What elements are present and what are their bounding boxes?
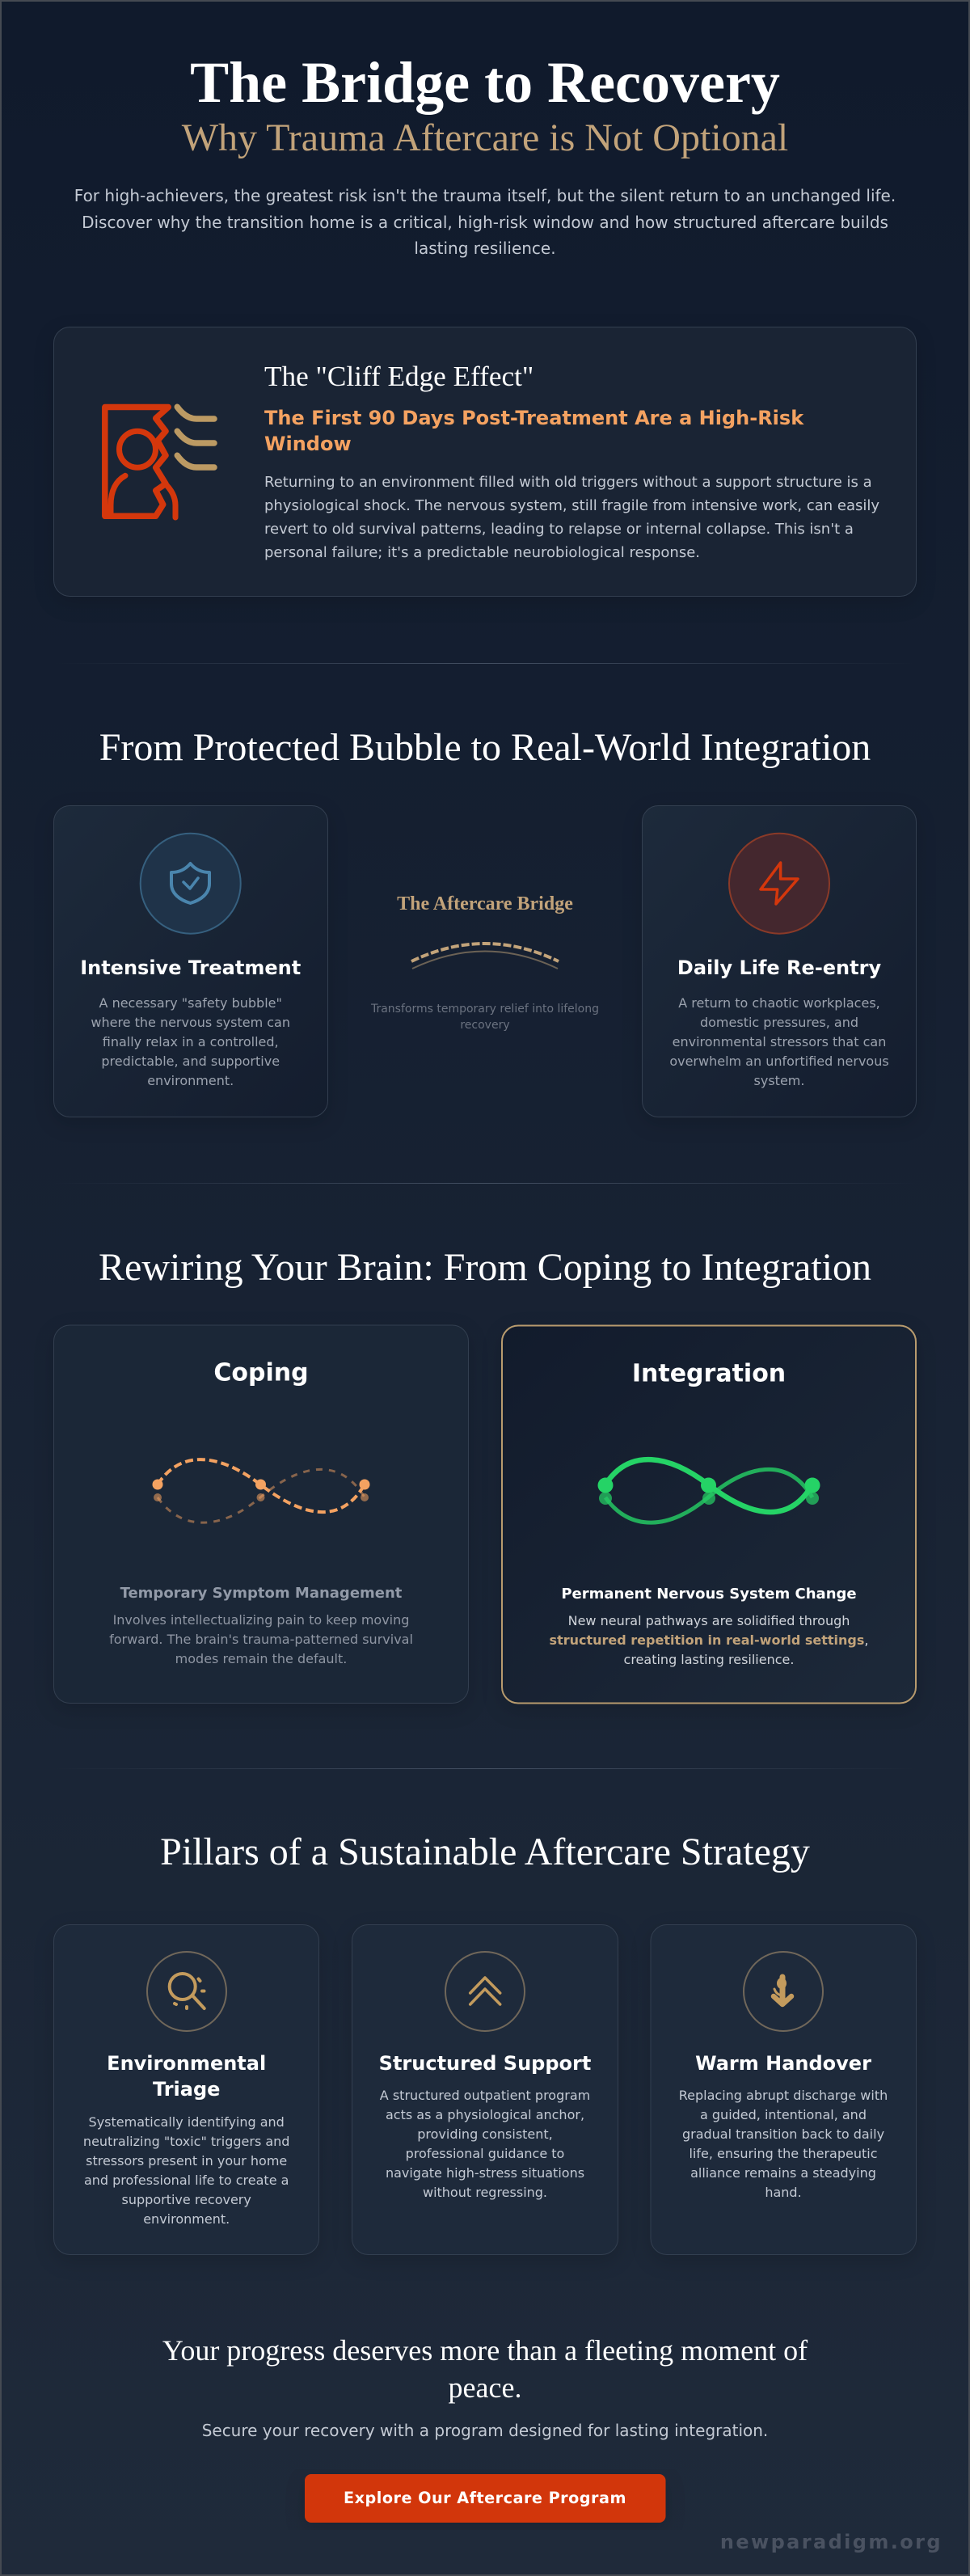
panel: environmental triage xyxy=(53,1924,318,2254)
call to action heading: peace. xyxy=(449,2371,521,2404)
card text: revert to old survival patterns, leading to relapse or internal collapse. This isn't a xyxy=(264,521,854,538)
heading: Environmental xyxy=(107,2052,266,2075)
button: Explore Our Aftercare Program xyxy=(344,2489,626,2507)
section heading: rewiring: Rewiring Your Brain: From Coping to Integration xyxy=(99,1246,871,1289)
chart: dashed neural pathways xyxy=(152,1459,370,1522)
card subheading: The First 90 Days Post-Treatment Are a High-Risk xyxy=(264,407,804,429)
title: The Bridge to Recovery xyxy=(190,50,780,115)
section heading: pillars: Pillars of a Sustainable Aftercare Strategy xyxy=(160,1831,810,1873)
text: A return to chaotic workplaces, xyxy=(678,995,880,1011)
text: overwhelm an unfortified nervous xyxy=(669,1054,889,1069)
intro text: lasting resilience. xyxy=(414,239,556,258)
text: professional guidance to xyxy=(406,2146,564,2161)
icon: anchor xyxy=(744,1952,823,2031)
card heading: The "Cliff Edge Effect" xyxy=(264,361,534,392)
heading: The Aftercare Bridge xyxy=(397,893,573,914)
text: Replacing abrupt discharge with xyxy=(679,2088,888,2103)
text xyxy=(550,1613,868,1667)
panel: structured support xyxy=(352,1924,618,2254)
heading: Coping xyxy=(213,1358,309,1387)
text: stressors present in your home xyxy=(86,2153,287,2168)
card text xyxy=(264,474,879,561)
icon: shield xyxy=(141,834,241,934)
text: finally relax in a controlled, xyxy=(103,1034,279,1049)
text: neutralizing "toxic" triggers and xyxy=(83,2134,289,2149)
text: predictable, and supportive xyxy=(101,1054,280,1069)
card subheading xyxy=(264,407,804,455)
text: providing consistent, xyxy=(417,2126,553,2142)
intro text: Discover why the transition home is a critical, high-risk window and how structured aftercare builds xyxy=(82,213,888,232)
text: environment. xyxy=(147,1073,234,1088)
heading: Structured Support xyxy=(379,2052,591,2075)
text: where the nervous system can xyxy=(91,1015,290,1030)
panel: integration xyxy=(502,1326,916,1703)
text: supportive recovery xyxy=(122,2192,251,2207)
text: Involves intellectualizing pain to keep moving xyxy=(113,1612,409,1628)
panel: intensive treatment xyxy=(53,805,328,1117)
text: forward. The brain's trauma-patterned survival xyxy=(109,1632,413,1647)
text: New neural pathways are solidified through xyxy=(568,1613,850,1628)
heading: Daily Life Re-entry xyxy=(677,956,881,979)
text xyxy=(91,995,290,1088)
text: A necessary "safety bubble" xyxy=(99,995,282,1011)
text: alliance remains a steadying xyxy=(690,2165,876,2181)
intro text xyxy=(74,186,896,258)
heading xyxy=(107,2052,266,2101)
icon: chevrons xyxy=(445,1952,525,2031)
text: gradual transition back to daily xyxy=(682,2126,884,2142)
subtitle: Why Trauma Aftercare is Not Optional xyxy=(182,116,788,159)
text: Transforms temporary relief into lifelong xyxy=(370,1003,599,1016)
panel: coping xyxy=(53,1325,469,1703)
text: system. xyxy=(754,1073,804,1088)
text: hand. xyxy=(765,2185,802,2200)
panel: cliff edge effect xyxy=(53,327,917,597)
text: environmental stressors that can xyxy=(673,1034,886,1049)
text: navigate high-stress situations xyxy=(386,2165,584,2181)
card text: personal failure; it's a predictable neurobiological response. xyxy=(264,544,700,561)
text xyxy=(669,995,889,1088)
panel: daily life re-entry xyxy=(642,805,917,1117)
text xyxy=(679,2088,888,2200)
text: Systematically identifying and xyxy=(89,2114,285,2130)
card text: Returning to an environment filled with old triggers without a support structure is a xyxy=(264,474,872,491)
text: A structured outpatient program xyxy=(380,2088,590,2103)
heading: Warm Handover xyxy=(695,2052,871,2075)
heading: Triage xyxy=(153,2078,220,2101)
text xyxy=(370,1003,599,1032)
heading: Intensive Treatment xyxy=(80,956,301,979)
panel: warm handover xyxy=(651,1924,917,2254)
call to action heading xyxy=(162,2334,808,2404)
icon: magnifier xyxy=(147,1952,226,2031)
text xyxy=(109,1612,413,1666)
text: acts as a physiological anchor, xyxy=(386,2107,584,2122)
panel: aftercare bridge xyxy=(370,893,599,1032)
text xyxy=(380,2088,590,2200)
call to action text: Secure your recovery with a program designed for lasting integration. xyxy=(202,2421,768,2440)
card text: physiological shock. The nervous system, still fragile from intensive work, can easily xyxy=(264,497,879,514)
section heading: bubble: From Protected Bubble to Real-World Integration xyxy=(99,726,871,769)
icon: lightning bolt xyxy=(729,834,829,934)
heading: Integration xyxy=(632,1360,786,1387)
text: recovery xyxy=(460,1019,510,1032)
watermark: newparadigm.org xyxy=(720,2531,943,2553)
text xyxy=(83,2114,289,2227)
text: modes remain the default. xyxy=(175,1651,347,1666)
text: life, ensuring the therapeutic xyxy=(689,2146,878,2161)
subheading: Temporary Symptom Management xyxy=(120,1585,403,1602)
icon: cliff edge xyxy=(105,407,214,517)
text: environment. xyxy=(143,2211,230,2227)
text: without regressing. xyxy=(423,2185,547,2200)
card subheading: Window xyxy=(264,433,352,455)
chart: solid neural pathways xyxy=(598,1459,820,1522)
text: a guided, intentional, and xyxy=(700,2107,867,2122)
intro text: For high-achievers, the greatest risk isn't the trauma itself, but the silent return to an unchanged life. xyxy=(74,186,896,205)
text: structured repetition in real-world settings, xyxy=(550,1632,868,1648)
call to action heading: Your progress deserves more than a fleeting moment of xyxy=(162,2334,808,2367)
button xyxy=(305,2474,666,2523)
icon: bridge arcs xyxy=(411,944,559,969)
text: creating lasting resilience. xyxy=(624,1652,794,1667)
text: domestic pressures, and xyxy=(700,1015,858,1030)
text: and professional life to create a xyxy=(84,2173,289,2188)
subheading: Permanent Nervous System Change xyxy=(561,1586,857,1603)
